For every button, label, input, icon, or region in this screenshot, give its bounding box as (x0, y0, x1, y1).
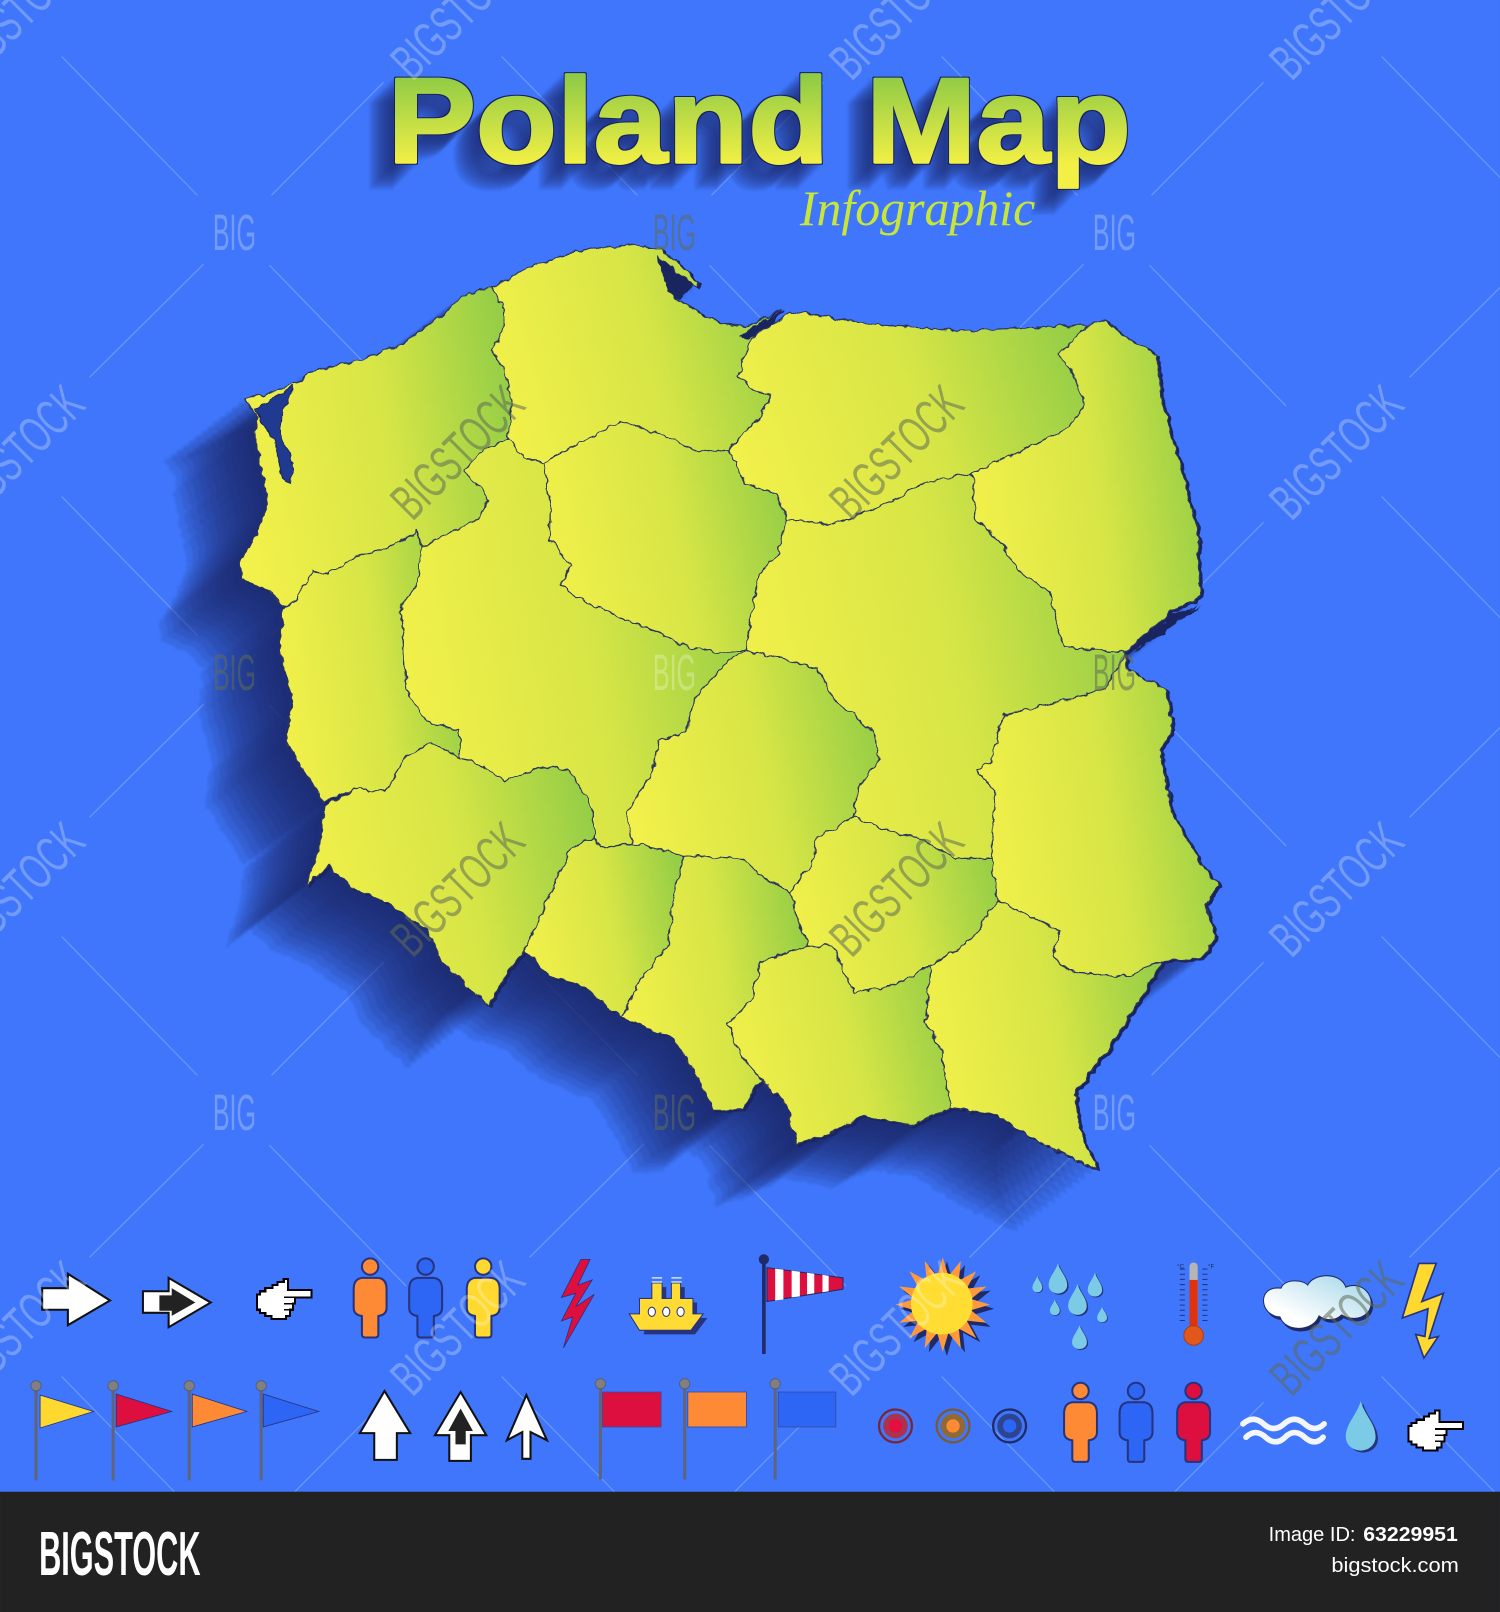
region: Lower Silesian (306, 742, 594, 1005)
water: eastern river notch (1131, 604, 1201, 652)
icon row 1 (42, 1254, 1443, 1358)
watermark: BIG tags: BIG (213, 203, 256, 261)
icon: pointing hand (257, 1279, 312, 1319)
icon: thermometer (1177, 1262, 1214, 1345)
icon: yellow person (467, 1258, 500, 1338)
map: Poland voivodeships with long shadow (240, 245, 1218, 1170)
watermark: BIGSTOCK diagonals: BIGSTOCK (379, 374, 535, 530)
icon: orange person (1064, 1383, 1097, 1462)
icon: pointing hand (1408, 1410, 1463, 1451)
icon: rain drops (1032, 1263, 1108, 1350)
icon: blue person (409, 1258, 442, 1338)
region: Lubusz (280, 530, 460, 802)
footer bar: BIGSTOCK (39, 1520, 201, 1589)
icon: orange pennant flag (184, 1381, 247, 1480)
icon: cloud (1264, 1276, 1373, 1331)
icon: red target (879, 1409, 912, 1442)
icon: windsock (759, 1254, 843, 1354)
icon: red person (1177, 1383, 1210, 1462)
region: Greater Poland (401, 440, 745, 848)
icon: orange person (354, 1258, 387, 1338)
icon: ship (629, 1278, 707, 1334)
watermark: BIGSTOCK diagonals: BIGSTOCK (818, 811, 974, 967)
icon row 2 (31, 1379, 1463, 1480)
region: Podlaskie (972, 319, 1201, 653)
icon: outlined up arrow (435, 1392, 486, 1461)
footer bar (0, 1492, 1500, 1612)
icon: blue flag (770, 1379, 836, 1479)
region: Lodz (627, 650, 879, 892)
icon: outlined right arrow (143, 1278, 211, 1327)
title: Poland Map (388, 52, 1131, 188)
site url: bigstock.com (1331, 1555, 1459, 1577)
icon: thermometer: °C (1177, 1264, 1185, 1271)
region: Lublin (977, 653, 1218, 977)
icon: white up arrow (360, 1391, 410, 1460)
region: Warmian-Masurian (728, 312, 1088, 524)
watermark: BIG tags: BIG (653, 203, 696, 261)
region: West Pomeranian (240, 288, 512, 609)
icon: orange target (937, 1409, 969, 1442)
watermark: BIG tags: BIG (213, 643, 256, 701)
watermark: BIGSTOCK diagonals: BIGSTOCK (1258, 1250, 1414, 1406)
icon: blue target (993, 1409, 1026, 1442)
icon: orange flag (680, 1379, 746, 1479)
region: Holy Cross (790, 817, 997, 992)
watermarks: BIG (1093, 643, 1136, 701)
water: Gulf of Gdansk shadow (658, 257, 691, 298)
icon: yellow pennant flag (31, 1381, 94, 1480)
water: Szczecin lagoon (255, 387, 293, 483)
region: Kuyavian-Pomeranian (545, 422, 788, 653)
water: Vistula lagoon (738, 310, 778, 339)
icon: blue pennant flag (256, 1381, 319, 1480)
watermarks: BIG (1093, 203, 1136, 261)
icon: thermometer: °F (1208, 1264, 1214, 1271)
subtitle: Infographic (799, 181, 1035, 236)
watermark: BIGSTOCK diagonals: BIGSTOCK (1258, 811, 1414, 967)
watermark: BIGSTOCK diagonals: BIGSTOCK (818, 374, 974, 530)
watermark: BIGSTOCK diagonals: BIGSTOCK (818, 1250, 974, 1406)
icon: sun (895, 1257, 994, 1356)
icon: cursor arrow (507, 1395, 547, 1459)
watermark: BIGSTOCK diagonals: BIGSTOCK (379, 1250, 535, 1406)
icon: red lightning (561, 1259, 594, 1348)
icon: yellow lightning (1402, 1263, 1443, 1358)
region: Silesian (622, 855, 807, 1110)
image id: 63229951 (1363, 1524, 1458, 1546)
region: Pomeranian (491, 245, 781, 463)
icon: red flag (595, 1379, 661, 1479)
watermark: BIGSTOCK diagonals: BIGSTOCK (379, 811, 535, 967)
region: Lesser Poland (728, 946, 951, 1143)
region: Opole (524, 838, 684, 1018)
watermark: BIGSTOCK diagonals: BIGSTOCK (1258, 374, 1414, 530)
watermark: BIG tags (213, 203, 1136, 1141)
icon: blue person (1120, 1383, 1152, 1462)
icon: red pennant flag (108, 1381, 172, 1480)
watermark: BIG tags: BIG (653, 1083, 696, 1141)
region: Masovian (745, 473, 1126, 858)
icon: waves (1243, 1419, 1324, 1442)
watermark: BIG tags: BIG (213, 1083, 256, 1141)
region: Subcarpathian (925, 900, 1162, 1170)
watermark: BIG tags: BIG (653, 643, 696, 701)
watermarks: BIG (1093, 1083, 1136, 1141)
image id: Image ID: (1269, 1524, 1356, 1546)
icon: white right arrow (42, 1274, 110, 1325)
icon: water drop (1346, 1401, 1378, 1453)
